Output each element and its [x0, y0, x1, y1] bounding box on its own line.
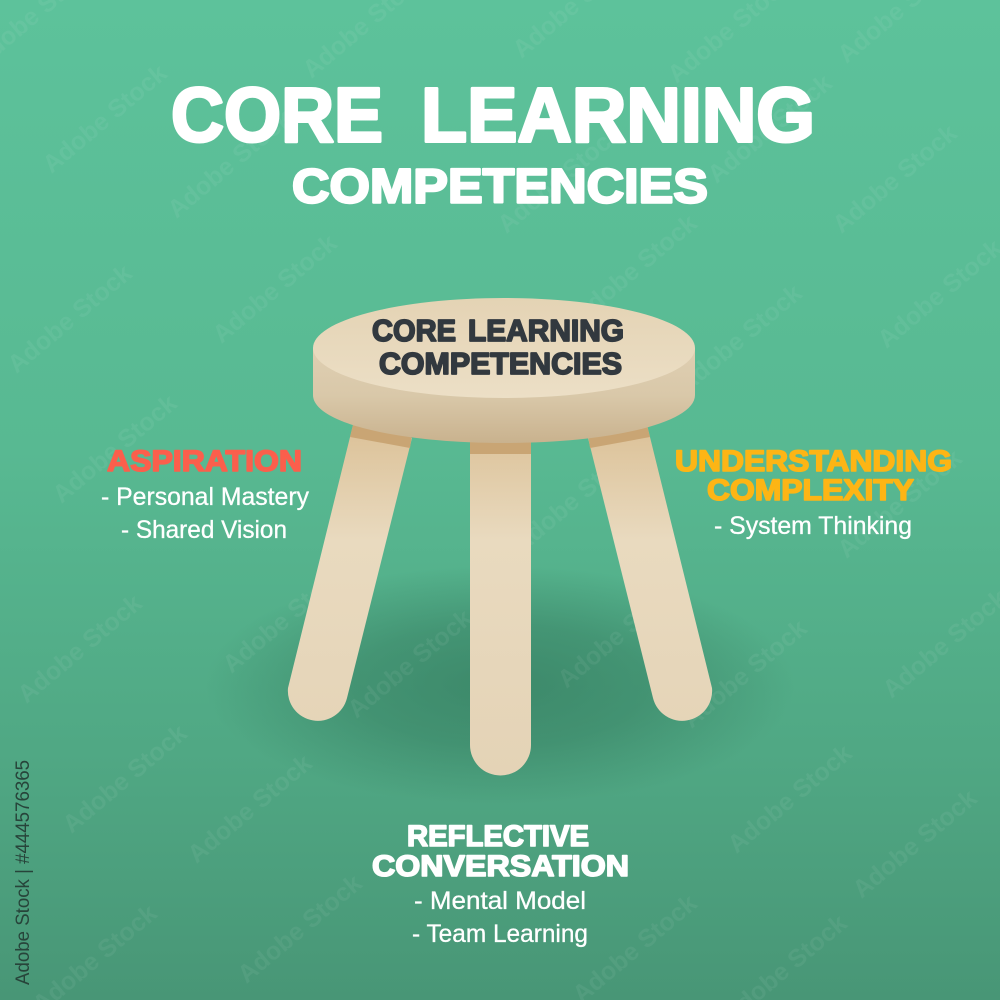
watermark pattern: Adobe Stock	[342, 604, 477, 724]
watermark pattern: Adobe Stock	[207, 229, 342, 349]
title line one: LEARNING	[421, 72, 815, 158]
shared vision: - Shared Vision	[121, 516, 287, 544]
seat top	[313, 298, 695, 398]
watermark pattern: Adobe Stock	[847, 784, 982, 904]
seat label line one: CORE	[372, 313, 456, 348]
watermark pattern: Adobe Stock	[182, 749, 317, 869]
complexity heading: COMPLEXITY	[707, 474, 914, 507]
personal mastery: - Personal Mastery	[101, 483, 309, 511]
title line one	[171, 72, 815, 158]
watermark pattern: Adobe Stock	[677, 614, 812, 734]
watermark pattern: Adobe Stock	[672, 279, 807, 399]
title	[171, 72, 815, 214]
aspiration heading: ASPIRATION	[107, 445, 302, 478]
seat label	[372, 313, 624, 381]
watermark pattern: Adobe Stock	[827, 119, 962, 239]
watermark pattern: Adobe Stock	[567, 209, 702, 329]
system thinking: - System Thinking	[714, 512, 912, 540]
stool floor shadow	[205, 565, 795, 805]
watermark pattern: Adobe Stock	[2, 259, 137, 379]
watermark pattern: Adobe Stock	[12, 589, 147, 709]
stool illustration	[288, 298, 712, 775]
watermark pattern: Adobe Stock	[162, 104, 297, 224]
watermark pattern: Adobe Stock	[552, 574, 687, 694]
watermark pattern: Adobe Stock	[217, 559, 352, 679]
understanding heading: UNDERSTANDING	[675, 445, 952, 478]
seat label line one: LEARNING	[468, 313, 624, 348]
reflective heading: REFLECTIVE	[407, 820, 589, 853]
watermark pattern: Adobe Stock	[232, 869, 367, 989]
conversation heading: CONVERSATION	[372, 850, 629, 883]
seat label line two: COMPETENCIES	[379, 346, 622, 381]
callout: understanding complexity	[675, 445, 952, 540]
title line two: COMPETENCIES	[292, 160, 708, 214]
seat edge	[313, 348, 695, 443]
callout: aspiration	[101, 445, 309, 544]
stock credit: Adobe Stock | #444576365	[13, 760, 34, 985]
mental model: - Mental Model	[414, 887, 586, 915]
seat label line one	[372, 313, 624, 348]
left leg	[288, 425, 412, 721]
centre leg	[470, 436, 531, 775]
watermark pattern: Adobe Stock	[37, 59, 172, 179]
watermark pattern: Adobe Stock	[507, 439, 642, 559]
watermark pattern: Adobe Stock	[702, 69, 837, 189]
right leg	[588, 425, 712, 721]
watermark pattern: Adobe Stock	[47, 389, 182, 509]
watermark pattern: Adobe Stock	[832, 444, 967, 564]
watermark pattern: Adobe Stock	[57, 719, 192, 839]
watermark pattern: Adobe Stock	[722, 739, 857, 859]
watermark pattern: Adobe Stock	[492, 119, 627, 239]
title line one: CORE	[171, 72, 383, 158]
callout: reflective conversation	[372, 820, 629, 948]
team learning: - Team Learning	[412, 920, 588, 948]
